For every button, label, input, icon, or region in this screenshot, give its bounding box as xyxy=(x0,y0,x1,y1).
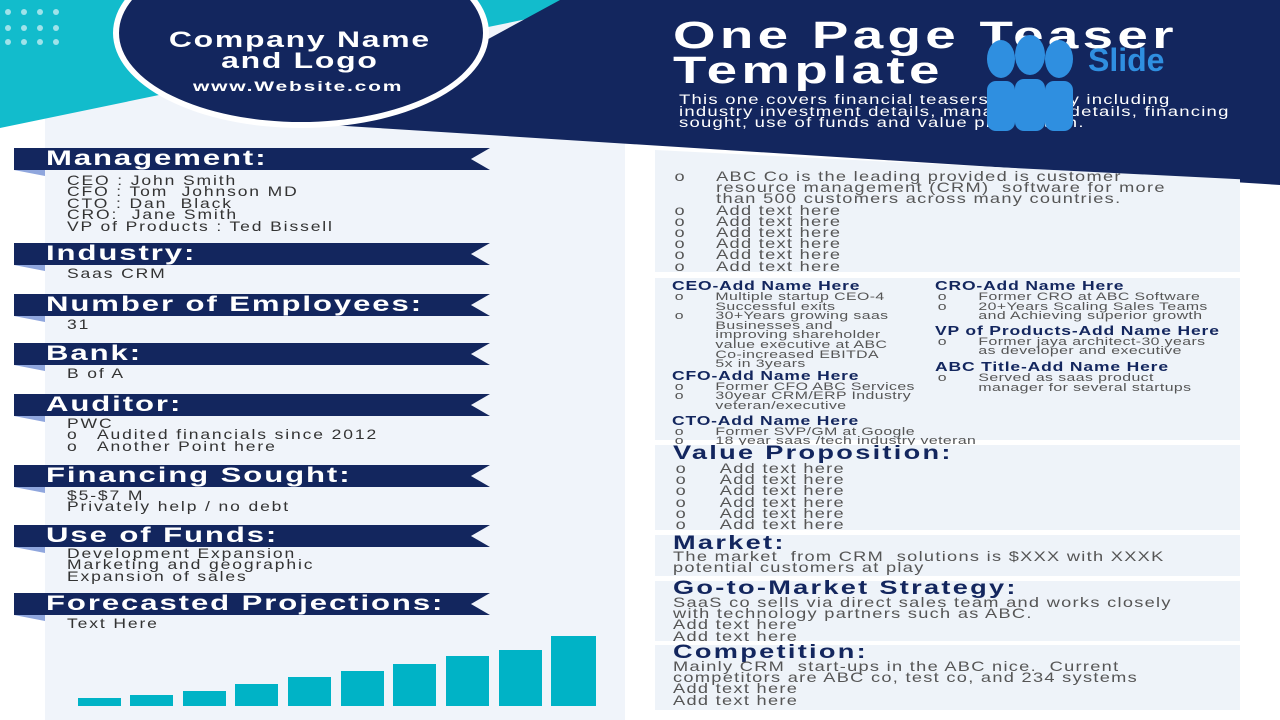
panel: go-to-market strategy: Add text here xyxy=(673,628,798,644)
panel: market: The market from CRM solutions is $XXX with XXXK xyxy=(673,548,1165,564)
panel: competition: Competition: xyxy=(673,642,868,663)
company logo circle: and Logo xyxy=(221,48,379,73)
panel: management team: o xyxy=(675,291,684,303)
company logo circle: Company Name xyxy=(169,27,431,52)
panel: competition: Add text here xyxy=(673,692,798,708)
section: employees: Number of Employees: xyxy=(46,293,423,316)
section: industry: Saas CRM xyxy=(67,265,167,281)
bar chart xyxy=(78,636,596,706)
section: bank: B of A xyxy=(67,365,125,381)
panel: value proposition: Add text here xyxy=(720,471,845,487)
panel: management team: as developer and executive Served as saas product xyxy=(978,345,1182,384)
text: o xyxy=(675,435,684,447)
panel: management team: o xyxy=(675,381,684,393)
section: employees: 31 xyxy=(67,316,90,332)
panel: competition: Mainly CRM start-ups in the ABC nice. Current xyxy=(673,658,1119,674)
panel: value proposition: Add text here xyxy=(720,494,845,510)
panel: management team: veteran/executive Former SVP/GM at Google xyxy=(715,400,915,438)
panel: competition: competitors are ABC co, test co, and 234 systems xyxy=(673,669,1138,685)
panel: value proposition: o xyxy=(676,471,687,487)
section: bank: Bank: xyxy=(46,342,142,365)
panel: management team: CEO-Add Name Here xyxy=(672,279,860,293)
title: Template xyxy=(673,50,944,92)
panel: go-to-market strategy xyxy=(655,581,1240,641)
panel: value proposition xyxy=(655,445,1240,530)
text: 18 year saas /tech industry veteran xyxy=(715,435,976,447)
panel: overview: resource management (CRM) software for more xyxy=(716,179,1166,195)
panel: management team: Successful exits xyxy=(715,301,836,313)
section: auditor: o xyxy=(67,426,79,442)
section: auditor: PWC xyxy=(67,415,113,431)
section: bank xyxy=(14,343,490,381)
panel: management team: Former CRO at ABC Software xyxy=(978,291,1200,303)
panel: management team: o xyxy=(675,390,684,402)
panel: management team xyxy=(655,278,1240,440)
section: forecasted projections: Forecasted Projections: xyxy=(46,592,444,615)
subtitle: This one covers financial teasers summary including xyxy=(679,92,1171,107)
header decorative shapes xyxy=(0,0,1280,185)
left background panel xyxy=(45,0,625,720)
subtitle xyxy=(679,92,1230,130)
subtitle: industry investment details, management details, financing xyxy=(679,104,1230,118)
panel: management team: CRO-Add Name Here xyxy=(935,279,1124,293)
section: use of funds: Expansion of sales xyxy=(67,568,248,584)
panel: go-to-market strategy: SaaS co sells via direct sales team and works closely xyxy=(673,594,1172,610)
panel: value proposition: o xyxy=(676,505,687,521)
title xyxy=(673,15,1178,92)
panel: management team: CFO-Add Name Here xyxy=(672,369,859,383)
panel: management team: 5x in 3years Former CFO ABC Services xyxy=(715,358,915,393)
panel: overview: Add text here xyxy=(716,213,841,229)
section: use of funds: Marketing and geographic xyxy=(67,556,314,572)
panel: management team: o xyxy=(938,301,947,313)
panel: overview: o xyxy=(674,224,686,240)
watermark logo xyxy=(987,35,1164,131)
panel: management team: o xyxy=(675,310,684,322)
panel: management team: ABC Title-Add Name Here xyxy=(935,360,1169,374)
section: employees xyxy=(14,294,490,332)
panel: management team: and Achieving superior growth Former jaya architect-30 years xyxy=(978,310,1205,348)
panel: value proposition: o xyxy=(676,460,687,476)
panel: overview xyxy=(655,150,1240,272)
panel: management team: 30year CRM/ERP Industry xyxy=(715,390,911,402)
panel: overview: Add text here xyxy=(716,235,841,251)
section: management: Management: xyxy=(46,147,267,170)
watermark logo: Slide xyxy=(1088,42,1164,78)
panel: overview: o xyxy=(674,258,686,274)
panel: management team: CTO-Add Name Here xyxy=(672,414,859,428)
section: use of funds: Development Expansion xyxy=(67,545,296,561)
panel: overview: o xyxy=(674,213,686,229)
panel: go-to-market strategy: with technology partners such as ABC. xyxy=(673,605,1033,621)
panel: overview: o xyxy=(674,168,686,184)
subtitle: sought, use of funds and value proposition. xyxy=(679,115,1085,130)
panel: competition xyxy=(655,645,1240,710)
panel: management team: 30+Years growing saas xyxy=(715,310,888,322)
section: forecasted projections: Text Here xyxy=(67,615,159,631)
panel: value proposition: Add text here xyxy=(720,460,845,476)
section: management: VP of Products : Ted Bissell xyxy=(67,218,334,234)
panel: management team: VP of Products-Add Name Here xyxy=(935,324,1220,338)
panel: value proposition: o xyxy=(676,494,687,510)
panel: management team: improving shareholder xyxy=(715,329,881,341)
section: management: CEO : John Smith xyxy=(67,172,237,188)
section: auditor xyxy=(14,394,490,454)
panel: value proposition: Add text here xyxy=(720,482,845,498)
title: One Page Teaser xyxy=(673,15,1178,57)
section: auditor: Another Point here xyxy=(97,438,277,454)
panel: overview: than 500 customers across many countries. xyxy=(716,190,1121,206)
company logo circle xyxy=(113,0,489,128)
panel: value proposition: Value Proposition: xyxy=(673,443,953,464)
panel: overview: Add text here xyxy=(716,246,841,262)
panel: overview: ABC Co is the leading provided is customer xyxy=(716,168,1122,184)
panel: management team: manager for several startups xyxy=(978,382,1191,394)
section: auditor: Auditor: xyxy=(46,393,182,416)
section: management: CFO : Tom Johnson MD xyxy=(67,183,299,199)
section: management: CTO : Dan Black xyxy=(67,195,233,211)
panel: management team: o xyxy=(675,426,684,438)
section: financing sought: $5-$7 M xyxy=(67,487,144,503)
panel: value proposition: Add text here xyxy=(720,516,845,532)
panel: market xyxy=(655,535,1240,576)
panel: management team: o xyxy=(938,291,947,303)
panel: market: Market: xyxy=(673,533,786,554)
panel: overview: Add text here xyxy=(716,258,841,274)
panel: value proposition: Add text here xyxy=(720,505,845,521)
panel: management team: 20+Years Scaling Sales Teams xyxy=(978,301,1208,313)
panel: management team: Businesses and xyxy=(715,320,833,332)
panel: value proposition: o xyxy=(676,516,687,532)
panel: overview: Add text here xyxy=(716,224,841,240)
panel: overview: o xyxy=(674,235,686,251)
panel: overview: Add text here xyxy=(716,202,841,218)
panel: overview: o xyxy=(674,246,686,262)
section: industry xyxy=(14,243,490,281)
section: auditor: o xyxy=(67,438,79,454)
section: financing sought: Financing Sought: xyxy=(46,464,351,487)
panel: overview: o xyxy=(674,202,686,218)
panel: management team: o xyxy=(938,336,947,348)
panel: go-to-market strategy: Go-to-Market Strategy: xyxy=(673,578,1018,599)
panel: market: potential customers at play xyxy=(673,559,925,575)
section: use of funds: Use of Funds: xyxy=(46,524,278,547)
panel: value proposition: o xyxy=(676,482,687,498)
panel: go-to-market strategy: Add text here xyxy=(673,616,798,632)
section: financing sought xyxy=(14,465,490,514)
company logo circle: www.Website.com xyxy=(193,78,403,94)
section: use of funds xyxy=(14,525,490,584)
section: financing sought: Privately help / no debt xyxy=(67,498,290,514)
panel: management team: o xyxy=(938,372,947,384)
panel: management team: value executive at ABC xyxy=(715,339,887,351)
section: forecasted projections xyxy=(14,593,490,631)
section: auditor: Audited financials since 2012 xyxy=(97,426,378,442)
panel: management team: Co-increased EBITDA xyxy=(715,349,879,361)
panel: management team: Multiple startup CEO-4 xyxy=(715,291,885,303)
section: industry: Industry: xyxy=(46,242,196,265)
section: management xyxy=(14,148,490,234)
section: management: CRO: Jane Smith xyxy=(67,206,238,222)
panel: competition: Add text here xyxy=(673,680,798,696)
